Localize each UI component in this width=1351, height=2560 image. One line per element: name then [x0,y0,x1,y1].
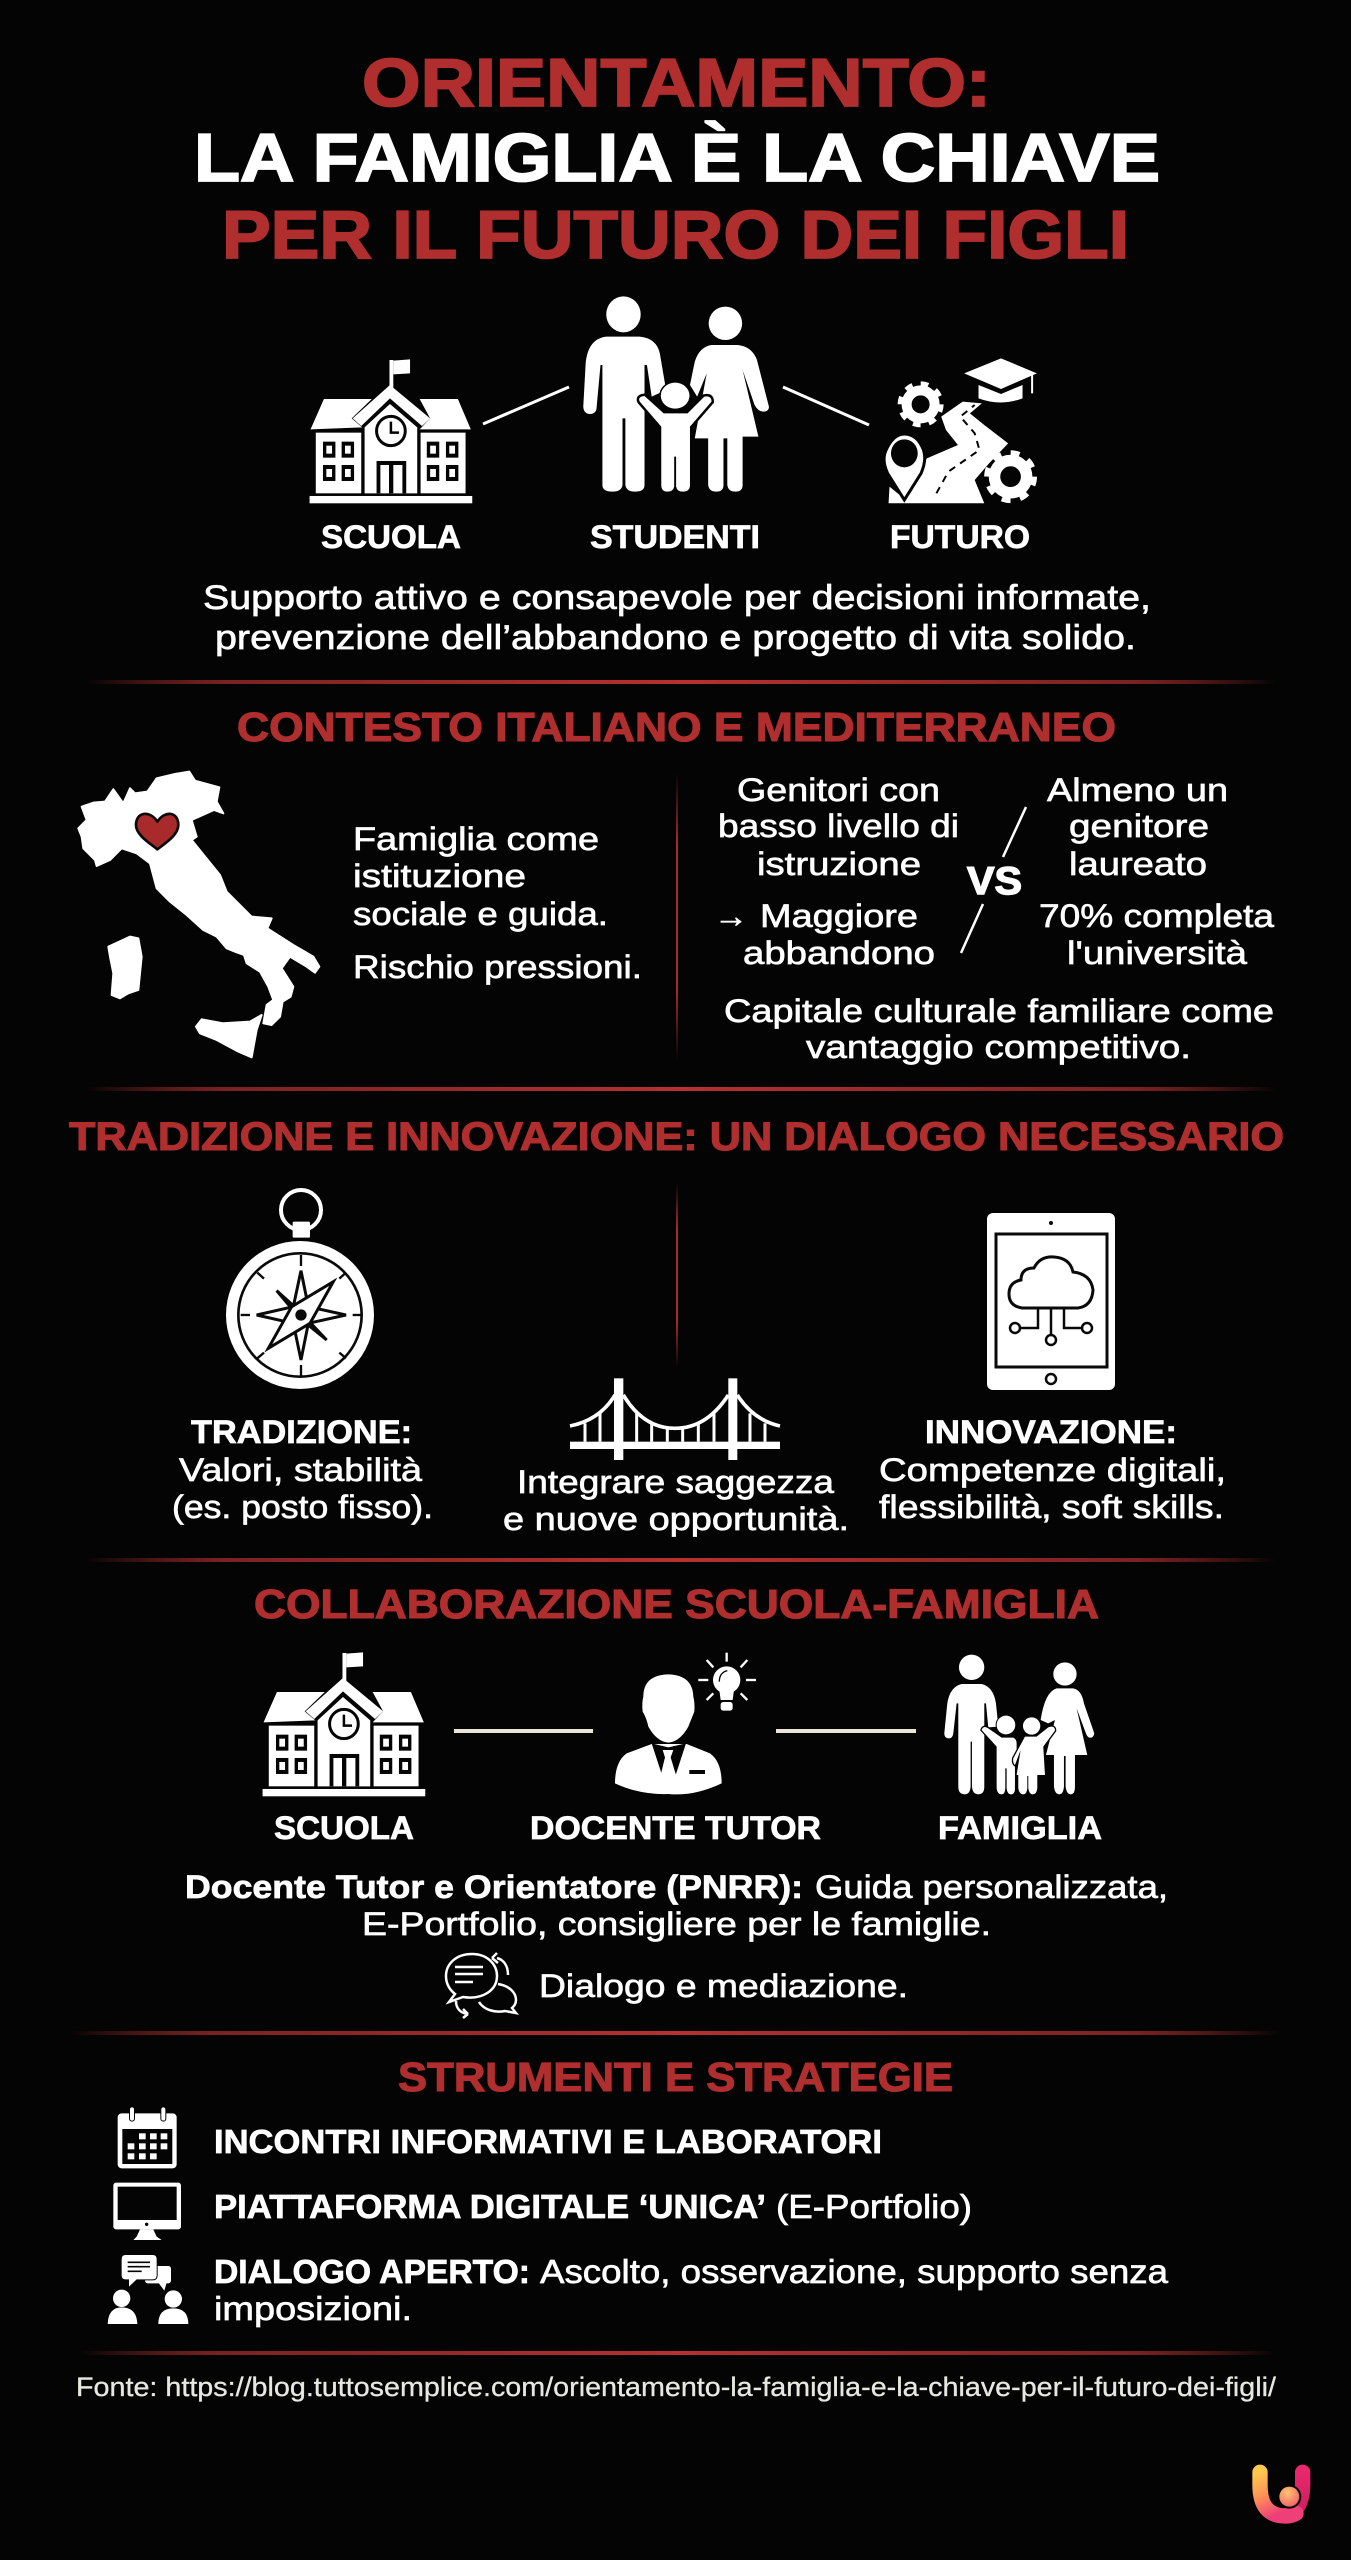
icon: family with child [583,296,769,492]
panel: strumenti e strategie [108,2107,1169,2327]
versus marker: VS [967,860,1022,903]
title: ORIENTAMENTO: [362,45,991,121]
title: PER IL FUTURO DEI FIGLI [222,197,1129,273]
text: dialogo aperto [214,2253,1169,2327]
icon: calendar [118,2107,177,2168]
panel: collaborazione [185,1652,1168,2018]
text: tradizione [172,1414,433,1525]
connector line: studenti to futuro [783,387,869,425]
text: tradizione: (es. posto fisso). [172,1489,433,1525]
text: famiglia come istituzione: Rischio pressioni. [353,949,642,985]
text: dialogo e mediazione: Dialogo e mediazione. [539,1968,908,2004]
icon: tablet with cloud [987,1213,1115,1390]
icon: tutor with light bulb [615,1653,756,1794]
icon: dialog bubbles [446,1953,516,2018]
text: intro: Supporto attivo e consapevole per decisioni informate, [203,579,1151,617]
text: innovazione: Competenze digitali, [879,1452,1226,1488]
connector line: docente to famiglia [776,1729,916,1733]
text: genitori con basso livello di istruzione [714,772,959,971]
text: genitori con basso livello di istruzione: istruzione [757,846,921,882]
text: dialogo aperto: imposizioni. [214,2290,412,2327]
title: LA FAMIGLIA È LA CHIAVE [194,120,1160,196]
labels: scuola docente famiglia: DOCENTE TUTOR [530,1810,821,1846]
panel: contesto italiano [78,772,1274,1065]
text: genitori con basso livello di istruzione: basso livello di [718,808,959,844]
versus marker [961,807,1026,953]
labels: scuola studenti futuro: FUTURO [890,519,1030,555]
text: docente tutor e orientatore [185,1869,1168,1942]
text: almeno un genitore laureato: Almeno un [1047,772,1228,808]
text: dialogo aperto: DIALOGO APERTO: [214,2253,530,2290]
text: capitale culturale [724,993,1274,1065]
text: integrare saggezza: Integrare saggezza [517,1464,834,1500]
text: piattaforma digitale: (E-Portfolio) [776,2188,972,2225]
heading: strumenti e strategie: STRUMENTI E STRATEGIE [398,2054,953,2100]
connector line: scuola to studenti [483,387,569,424]
panel: scuola studenti futuro [203,296,1151,657]
text: innovazione: INNOVAZIONE: [925,1414,1177,1450]
text: almeno un genitore laureato: l'università [1067,935,1247,971]
text: piattaforma digitale: PIATTAFORMA DIGITALE ‘UNICA’ [214,2188,766,2225]
icon: monitor [113,2183,181,2240]
icon: family with two children [944,1655,1094,1794]
text: intro: prevenzione dell’abbandono e progetto di vita solido. [215,619,1136,657]
icon: bridge [570,1378,780,1460]
text: integrare saggezza: e nuove opportunità. [503,1501,849,1537]
logo [1260,2472,1303,2516]
text: famiglia come istituzione: istituzione [353,858,526,894]
icon: school [263,1652,425,1796]
icon: people talking [108,2255,188,2324]
text: intro [203,579,1151,657]
labels: scuola studenti futuro: SCUOLA [321,519,461,555]
text: incontri informativi: INCONTRI INFORMATIVI E LABORATORI [214,2123,882,2160]
text: docente tutor e orientatore: E-Portfolio, consigliere per le famiglie. [362,1906,991,1942]
text: innovazione [879,1414,1226,1525]
text: genitori con basso livello di istruzione: Maggiore [760,898,918,934]
text: dialogo aperto: Ascolto, osservazione, supporto senza [540,2253,1169,2290]
source citation: Fonte: https://blog.tuttosemplice.com/orientamento-la-famiglia-e-la-chiave-per-il-futuro-dei-figli/ [76,2372,1277,2402]
text: capitale culturale: Capitale culturale familiare come [724,993,1274,1029]
icon: road with gears and graduation cap [884,358,1037,503]
icon: map of Italy with heart [78,772,319,1057]
text: capitale culturale: vantaggio competitivo. [806,1029,1191,1065]
text: integrare saggezza [503,1464,849,1537]
text: famiglia come istituzione [353,821,642,985]
text: almeno un genitore laureato: laureato [1069,846,1207,882]
text: piattaforma digitale [214,2188,972,2225]
title [194,45,1160,273]
text: famiglia come istituzione: Famiglia come [353,821,599,857]
text: famiglia come istituzione: sociale e guida. [353,896,608,932]
icon: school [310,359,472,503]
text: almeno un genitore laureato: genitore [1069,808,1209,844]
labels: scuola docente famiglia: SCUOLA [274,1810,414,1846]
connector line: scuola to docente [454,1729,593,1733]
heading: contesto italiano: CONTESTO ITALIANO E MEDITERRANEO [237,704,1116,750]
heading: tradizione e innovazione: TRADIZIONE E INNOVAZIONE: UN DIALOGO NECESSARIO [69,1115,1284,1159]
labels: scuola studenti futuro [321,519,1030,555]
text: innovazione: flessibilità, soft skills. [879,1489,1224,1525]
labels: scuola docente famiglia: FAMIGLIA [938,1810,1102,1846]
panel: tradizione e innovazione [172,1183,1226,1537]
icon: compass [226,1190,374,1389]
text: tradizione: Valori, stabilità [179,1452,422,1488]
text: genitori con basso livello di istruzione: Genitori con [737,772,940,808]
labels: scuola docente famiglia [274,1810,1102,1846]
text: almeno un genitore laureato [1039,772,1274,971]
labels: scuola studenti futuro: STUDENTI [590,519,760,555]
text: docente tutor e orientatore: Docente Tutor e Orientatore (PNRR): [185,1869,803,1905]
heading: collaborazione scuola-famiglia: COLLABORAZIONE SCUOLA-FAMIGLIA [254,1581,1099,1627]
text: tradizione: TRADIZIONE: [191,1414,412,1450]
text: docente tutor e orientatore: Guida personalizzata, [815,1869,1168,1905]
text: genitori con basso livello di istruzione: abbandono [743,935,935,971]
text: almeno un genitore laureato: 70% completa [1039,898,1274,934]
text: genitori con basso livello di istruzione: → [714,898,748,934]
